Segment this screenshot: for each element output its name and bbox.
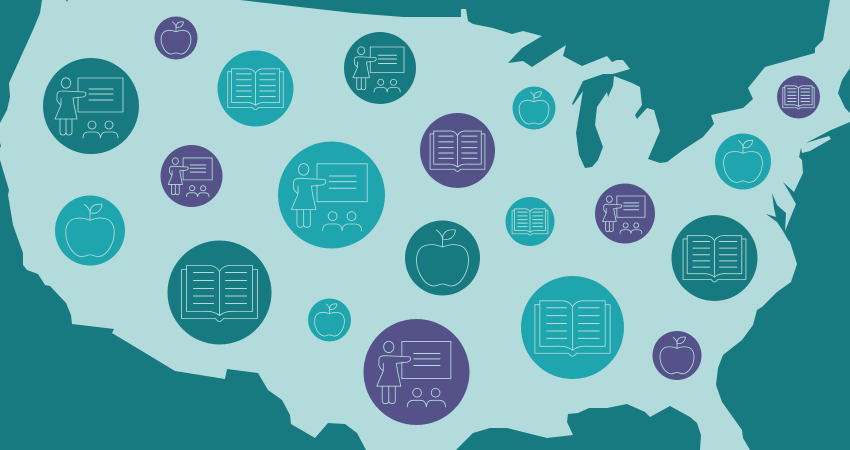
icon: book, teal, north west (218, 50, 294, 126)
icon: teacher, dark, north (344, 32, 416, 104)
icon: apple, teal, midwest (512, 86, 556, 130)
icon: book, teal, south (521, 276, 624, 379)
icon: teacher, dark, far west (43, 58, 139, 154)
canada and great lakes (240, 0, 830, 168)
pacific and mexico (0, 160, 366, 450)
pacific coast notch (0, 0, 68, 148)
icon: book, dark, south west (168, 240, 272, 344)
icon: book, purple, north east (777, 76, 820, 118)
icon: apple, teal, far west (55, 196, 125, 266)
icon: apple, teal, north east (715, 134, 771, 190)
icon: teacher, purple, west (160, 145, 222, 207)
icon: book, dark, east (672, 215, 758, 301)
icon: book, purple, centre (420, 113, 495, 188)
icon: book, teal, centre small (506, 197, 554, 246)
pacific northwest water (0, 0, 42, 123)
icon: teacher, purple, midwest (595, 184, 655, 244)
atlantic ocean (716, 122, 850, 450)
nova scotia (838, 68, 850, 113)
gulf of mexico (456, 404, 701, 450)
icon: teacher, teal, centre west (278, 142, 385, 248)
icon: apple, purple, south east (652, 331, 702, 380)
icon: teacher, purple, south (364, 319, 470, 425)
icon: apple, teal, south west (308, 298, 351, 342)
icon: apple, purple, north west (154, 16, 198, 60)
icon: apple, dark, centre (405, 220, 480, 296)
